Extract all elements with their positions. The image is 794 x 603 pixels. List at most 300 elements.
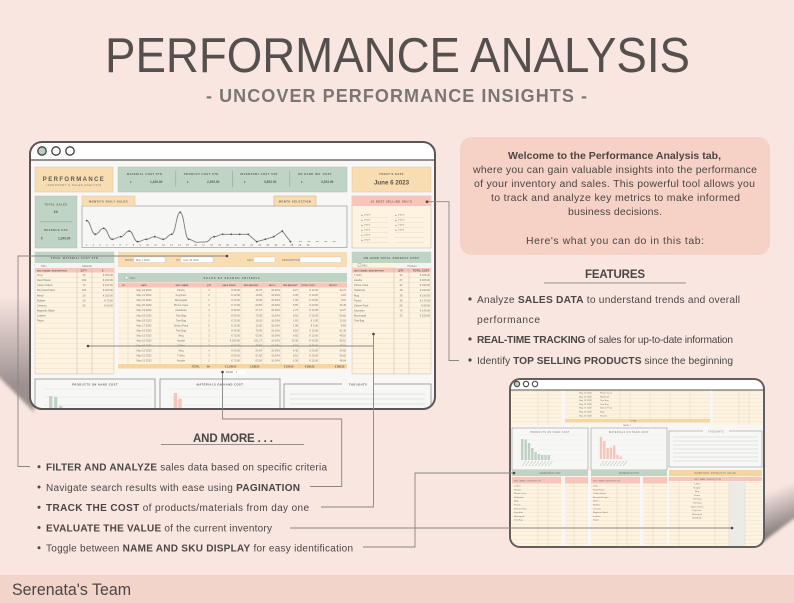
table: on hand total product cost: € 240.00 (420, 288, 431, 292)
top 10 best selling (352, 196, 431, 248)
table: green materials cost: Ceramic (593, 507, 602, 510)
table: sales by search criteria: 61.36 (340, 328, 347, 332)
table: on hand total product cost: 70 (400, 309, 403, 313)
table: sales by search criteria: May 15 2023 (136, 344, 152, 348)
table: sales by search criteria: € 12.00 (231, 298, 241, 302)
chart: materials on hand cost: MATERIALS ON HAND COST (609, 431, 649, 434)
table: sales by search criteria: € 180.00 (230, 338, 241, 342)
table: green materials cost: Vinyl (593, 486, 598, 488)
table: sales by search criteria: 1.09 (293, 293, 299, 297)
connector: pagination (222, 372, 342, 486)
table: sales by search criteria: TAX AMOUNT (283, 284, 298, 287)
table: on hand total product cost: € 150.00 (420, 314, 431, 318)
table: green products cost: Hoodie (514, 489, 522, 491)
table: total material cost: € 60.00 (104, 303, 114, 307)
table: sales by search criteria: SKU / NAME (176, 284, 189, 287)
table: green products cost: T-Shirt (514, 484, 521, 488)
table: total material cost: 100 (82, 288, 87, 292)
table: sales by search criteria: 2 (208, 293, 210, 297)
table: sales by search criteria: Tote Bag (176, 328, 187, 332)
table: sales by search criteria: 0.91 (341, 298, 347, 302)
table: inventory products value: Notebook (692, 517, 703, 520)
table: total material cost: € 200.00 (103, 293, 114, 297)
table: green materials cost: Magnetic Black (593, 511, 609, 514)
header: performance (35, 167, 113, 192)
table: total material cost: € (102, 268, 104, 272)
table: sales by search criteria: 10.00% (271, 308, 281, 312)
subtitle: - UNCOVER PERFORMANCE INSIGHTS - (206, 86, 587, 106)
table: sales by search criteria: 3 (208, 328, 210, 332)
and more heading: AND MORE . . . (193, 433, 273, 445)
table: on hand total product cost: 38 (400, 293, 403, 297)
table: total material cost: € 200.00 (103, 288, 114, 292)
top tables: May 17 2023 (579, 408, 592, 410)
table: inventory products value (669, 470, 762, 548)
table: sales by search criteria: TOTAL (192, 365, 200, 368)
table: total material cost: SKU (41, 264, 46, 268)
table: sales by search criteria: 1 (208, 318, 210, 322)
top tables: May 19 2023 (579, 396, 592, 398)
top tables: Phone Case (600, 392, 613, 394)
table: on hand total product cost: 48 (400, 288, 403, 292)
table: total material cost: 20 (83, 293, 86, 297)
table: inventory products value: Mousepad (692, 514, 703, 516)
table: on hand total product cost: T-Shirt (354, 273, 362, 277)
top tables: May 18 2023 (579, 400, 592, 402)
table: sales by search criteria: 48.64 (340, 359, 347, 363)
table: inventory products value: Tote Bag (693, 498, 702, 501)
intro callout box: Here's what you can do in this tab: (526, 235, 704, 247)
table: green products cost: GENERATED COST (539, 472, 561, 475)
table: sales by search criteria: € 15.00 (231, 323, 241, 327)
table: sales by search criteria: T-Shirt (177, 344, 185, 348)
connector: top selling (427, 202, 459, 360)
table: total material cost: € 70.00 (104, 298, 114, 302)
KPI strip: 3,253.00 (321, 180, 334, 184)
table: sales by search criteria: May 15 2023 (136, 349, 152, 353)
table: sales by search criteria: 10.00% (271, 349, 281, 353)
table: on hand total product cost: Tote Bag (354, 319, 365, 323)
table: sales by search criteria: May 15 2023 (136, 354, 152, 358)
lower window frame (510, 379, 764, 547)
intro callout box: business decisions. (568, 206, 662, 218)
table: green materials cost: Paper (593, 519, 599, 522)
table: on hand total product cost: € 420.00 (420, 273, 431, 277)
intro callout box: where you can gain valuable insights into the performance (472, 164, 757, 176)
table: sales by search criteria: SALE PRICE (222, 284, 236, 287)
table: on hand total product cost: Phone Case (354, 283, 369, 287)
and more list: FILTER AND ANALYZE sales data based on specific criteria (46, 462, 327, 474)
table: sales by search criteria: € 104.00 (284, 365, 294, 368)
table: sales by search criteria: 4 (208, 349, 210, 353)
table: sales by search criteria: € 15.00 (309, 313, 319, 317)
chart: materials on hand cost (160, 378, 280, 408)
table: sales by search criteria: Mousepad (175, 298, 188, 302)
top tables: May 18 2023 (579, 404, 592, 406)
date and filter bar: FROM: (125, 258, 134, 262)
table: sales by search criteria: 66 (207, 365, 210, 368)
KPI strip: € (301, 180, 303, 184)
table: sales by search criteria: May 21 2023 (136, 293, 152, 297)
table: sales by search criteria: 10.05 (256, 298, 263, 302)
table: sales by search criteria: € 360.00 (305, 365, 315, 368)
table: sales by search criteria: 12.60 (256, 323, 263, 327)
date and filter bar: June 30 2023 (183, 258, 199, 262)
table: total material cost (35, 252, 114, 374)
table: sales by search criteria: 18.18 (256, 318, 263, 322)
total sales panel: REVENUE STD (44, 228, 68, 232)
table: sales by search criteria: Hoodie (177, 359, 186, 363)
chart: products on hand cost (512, 428, 588, 470)
table: inventory products value: SKU / NAME / DESCRIPTION (694, 478, 721, 481)
table: on hand total product cost: Mousepad (354, 314, 367, 318)
window control dots (38, 147, 74, 155)
table: green products cost: Mousepad (514, 516, 525, 518)
line chart: month's daily sales: 1 2 3 4 5 6 7 8 9 10 11 12 13 14 15 16 17 18 19 20 21 22 23 24 25 26 27 28 29 30 (86, 244, 310, 247)
table: green materials cost: MATERIALS COST (619, 472, 640, 475)
table: inventory products value: Poster (694, 494, 700, 497)
table: sales by search criteria: 5 (208, 323, 210, 327)
table: sales by search criteria: € 25.00 (309, 344, 319, 348)
KPI strip: 3,693.00 (264, 180, 277, 184)
table: inventory products value: Sticker Pack (691, 505, 704, 508)
table: total material cost: Leather (37, 314, 46, 318)
table: sales by search criteria: PROFIT (329, 285, 338, 287)
table: sales by search criteria: ID (122, 285, 125, 287)
footer band: Serenata's Team (12, 580, 131, 599)
table: sales by search criteria: 56.82 (340, 354, 347, 358)
table: sales by search criteria: TOTAL COST (301, 284, 316, 287)
table: sales by search criteria: 0.91 (341, 293, 347, 297)
table: on hand total product cost: Mug (354, 293, 360, 297)
table: total material cost: 40 (83, 273, 86, 277)
table: sales by search criteria: € 15.00 (309, 308, 319, 312)
table: on hand total product cost: € 89.00 (421, 303, 431, 307)
and more list: EVALUATE THE VALUE of the current inventory (46, 523, 272, 534)
table: sales by search criteria: € 20.00 (309, 349, 319, 353)
table: on hand total product cost: 42 (400, 273, 403, 277)
table: sales by search criteria: 1 (208, 298, 210, 302)
shadow: main window (0, 290, 34, 412)
table: green materials cost: Cotton Fabric (593, 492, 607, 495)
table: sales by search criteria: May 15 2023 (136, 359, 152, 363)
table: sales by search criteria: SALES BY SEARCH CRITERIA (204, 276, 260, 280)
table: total material cost: Material (82, 264, 92, 268)
line chart: month's daily sales: MONTH SELECTION (279, 200, 311, 204)
table: total material cost: Ceramic (37, 303, 47, 307)
table: sales by search criteria: SKU (130, 276, 135, 280)
table: sales by search criteria: 151.27 (254, 338, 263, 342)
table: sales by search criteria: 10.00% (271, 313, 281, 317)
table: sales by search criteria: Tote Bag (176, 313, 187, 317)
table: green materials cost: Hard Plastic (593, 488, 606, 491)
table: sales by search criteria: May 15 2023 (136, 333, 152, 337)
table: sales by search criteria: € 72.00 (231, 303, 241, 307)
table: total material cost: Cotton Fabric (37, 283, 53, 287)
top tables: Mug (600, 412, 605, 414)
total sales panel (35, 196, 77, 248)
table: sales by search criteria: 10.00% (271, 338, 281, 342)
date and filter bar: DESCRIPTION: (282, 258, 301, 262)
table: sales by search criteria: 8.18 (293, 344, 299, 348)
features list (468, 295, 740, 367)
table: sales by search criteria: 10.84 (256, 293, 263, 297)
table: sales by search criteria: 2.73 (293, 308, 299, 312)
table: sales by search criteria: May 15 2023 (136, 338, 152, 342)
table: sales by search criteria: 3 (208, 303, 210, 307)
top tables: Sticker Pack (600, 407, 613, 410)
chart: materials on hand cost (591, 428, 667, 470)
title: PERFORMANCE ANALYSIS (105, 29, 690, 83)
table: total material cost: € 200.00 (103, 278, 114, 282)
table: sales by search criteria: 12.27 (340, 308, 347, 312)
table: on hand total product cost: 33 (400, 283, 403, 287)
title bar (31, 143, 434, 159)
table: sales by search criteria: € 20.00 (231, 318, 241, 322)
table: sales by search criteria: May 18 2023 (136, 318, 152, 322)
table: on hand total product cost: ON HAND TOTAL PRODUCT COST (364, 256, 419, 260)
table: sales by search criteria: 48.18 (340, 333, 347, 337)
table: green materials cost: Rubber (593, 504, 600, 506)
table: sales by search criteria: 10.00% (271, 323, 281, 327)
table: sales by search criteria: € 5.00 (311, 318, 319, 322)
table: total material cost: Recycled Paper (37, 288, 55, 292)
table: sales by search criteria: € 20.00 (309, 303, 319, 307)
table: sales by search criteria: 81.82 (256, 354, 263, 358)
table: sales by search criteria: 40.91 (340, 344, 347, 348)
table: green products cost: Notebook (514, 496, 524, 499)
connector: track the cost (88, 334, 374, 507)
table: on hand total product cost: Product (408, 264, 417, 268)
connector end dots (87, 200, 733, 529)
shadow: lower window (760, 482, 794, 544)
KPI strip: ON HAND INV. COST (298, 172, 332, 176)
table: green products cost: Phone Case (514, 493, 527, 495)
table: sales by search criteria: 13.18 (340, 318, 347, 322)
table: sales by search criteria: 34.55 (340, 349, 347, 353)
top tables: May 20 2023 (579, 392, 592, 394)
table: sales by search criteria: T-Shirt (177, 354, 185, 358)
table: sales by search criteria: € 70.00 (231, 359, 241, 363)
table: on hand total product cost: Notebook (354, 288, 366, 292)
pagination (226, 370, 245, 374)
table: total material cost: Rubber (37, 298, 46, 302)
top tables: Tote Bag (600, 399, 609, 402)
intro callout box: of your inventory and sales. This powerful tool allows you (474, 178, 755, 190)
intro callout box: Welcome to the Performance Analysis tab, (508, 150, 721, 162)
table: total material cost: Hard Plastic (37, 278, 52, 282)
table: sales by search criteria: Plushy (177, 288, 186, 292)
lower window control dots (514, 381, 538, 387)
chart: materials on hand cost: MATERIALS ON HAND COST (197, 382, 243, 386)
table: on hand total product cost: Hoodie (354, 278, 363, 282)
table: sales by search criteria: 45.45 (340, 303, 347, 307)
connector arrows (18, 200, 733, 547)
KPI strip: INVENTORY COST STD (240, 172, 278, 176)
table: on hand total product cost: € 140.00 (420, 309, 431, 313)
total sales panel: 1,249.00 (58, 236, 71, 240)
features list: REAL-TIME TRACKING of sales for up-to-date information (477, 335, 733, 346)
table: sales by search criteria: May 21 2023 (136, 298, 152, 302)
table: sales by search criteria: May 24 2023 (136, 288, 152, 292)
table: inventory products value: Mug (695, 491, 700, 493)
table: sales by search criteria: May 17 2023 (136, 323, 152, 327)
top tables (512, 390, 762, 427)
table: sales by search criteria: 75.55 (256, 313, 263, 317)
table: inventory products value: INVENTORY PRODUCTS VALUE (694, 472, 736, 475)
table: on hand total product cost: € 405.00 (420, 278, 431, 282)
table: sales by search criteria: 27.27 (256, 308, 263, 312)
table: on hand total product cost: Poster (354, 298, 362, 302)
table: sales by search criteria: TAX % (269, 284, 275, 287)
today's date (352, 167, 431, 192)
table: sales by search criteria: 9.27 (293, 288, 299, 292)
table: green materials cost (591, 470, 667, 548)
table: on hand total product cost (352, 252, 431, 374)
top tables: Hoodie (600, 415, 608, 417)
table: sales by search criteria: 76.36 (256, 328, 263, 332)
pagination: PAGE (226, 370, 233, 374)
table: green products cost: Tote Bag (514, 519, 523, 522)
table: sales by search criteria: 10.00% (271, 298, 281, 302)
table: sales by search criteria: 1.82 (293, 318, 299, 322)
table: sales by search criteria: 10.00% (271, 354, 281, 358)
connector: toggle name and sku (363, 473, 514, 547)
KPI strip: 1,449.00 (150, 180, 163, 184)
table: sales by search criteria: 10.00% (271, 359, 281, 363)
KPI strip: € (130, 180, 132, 184)
top tables: May 15 2023 (579, 415, 592, 417)
table: sales by search criteria: Mug (178, 333, 184, 337)
table: total material cost: QTY (81, 268, 87, 272)
KPI strip: € (187, 180, 189, 184)
KPI strip: 2,293.00 (207, 180, 220, 184)
table: sales by search criteria (118, 273, 347, 368)
table: sales by search criteria: 46.75 (256, 288, 263, 292)
date and filter bar: TO: (176, 258, 181, 262)
table: on hand total product cost: € 190.00 (420, 293, 431, 297)
table: on hand total product cost: 27 (400, 278, 403, 282)
table: on hand total product cost: SKU / NAME / DESCRIPTION (354, 270, 384, 272)
table: green products cost: Keychain (514, 512, 524, 514)
table: sales by search criteria: 90.91 (340, 338, 347, 342)
top 10 best selling: ► YYYY (395, 224, 405, 227)
header: performance: INVENTORY & SALES ANALYSIS (46, 183, 102, 187)
table: total material cost: Magnetic Black (37, 309, 55, 313)
table: sales by search criteria: € 56.00 (231, 288, 241, 292)
top tables: May 16 2023 (579, 412, 592, 414)
table: sales by search criteria: 3 (208, 313, 210, 317)
chart: products on hand cost: PRODUCTS ON HAND COST (530, 431, 570, 434)
table: sales by search criteria: 1.09 (293, 298, 299, 302)
table: green products cost (512, 470, 588, 548)
table: total material cost: Metal (37, 293, 44, 297)
table: inventory products value: Keychain (692, 510, 702, 512)
table: sales by search criteria: € 25.00 (309, 354, 319, 358)
line chart: month's daily sales (82, 196, 347, 248)
table: sales by search criteria: 63.60 (256, 333, 263, 337)
dashboard contents (30, 142, 435, 414)
table: sales by search criteria: € 10.00 (309, 298, 319, 302)
header: performance: PERFORMANCE (43, 177, 105, 183)
table: sales by search criteria: May 18 2023 (136, 313, 152, 317)
table: sales by search criteria: € 586.00 (335, 365, 345, 368)
top tables: Tote Bag (600, 403, 609, 406)
total sales panel: 66 (54, 210, 58, 214)
connector: evaluate the value (290, 527, 732, 529)
intro callout box: to track and analyze key metrics to make informed (491, 192, 740, 204)
pagination: 1 (236, 370, 238, 374)
table: sales by search criteria: May 19 2023 (136, 308, 152, 312)
top 10 best selling: ► YYYY (395, 219, 405, 222)
window: inventory dashboard (510, 379, 764, 548)
table: sales by search criteria: 10.00% (271, 288, 281, 292)
table: total material cost: € 300.00 (103, 273, 114, 277)
table: sales by search criteria: 3 (208, 333, 210, 337)
table: on hand total product cost: SKU (362, 264, 367, 268)
table: sales by search criteria: 8.64 (341, 323, 347, 327)
table: sales by search criteria: € 5.00 (311, 323, 319, 327)
table: on hand total product cost: 35 (400, 298, 403, 302)
table: green materials cost: Leather (593, 515, 601, 518)
table: sales by search criteria: 78.55 (256, 344, 263, 348)
table: sales by search criteria: Keychain (176, 293, 187, 297)
top 10 best selling: ► YYYY (361, 219, 371, 222)
table: total material cost: 70 (83, 283, 86, 287)
table: sales by search criteria: 10.00% (271, 303, 281, 307)
table: sales by search criteria: 1,038.00 (250, 365, 260, 368)
table: sales by search criteria: € 60.00 (231, 349, 241, 353)
table: sales by search criteria: € 15.00 (309, 359, 319, 363)
table: sales by search criteria: 16.36 (292, 338, 299, 342)
and more list: Navigate search results with ease using PAGINATION (46, 483, 300, 494)
title bar (511, 380, 763, 390)
table: sales by search criteria: 2 (208, 338, 210, 342)
KPI strip: MATERIAL COST STD (127, 172, 162, 176)
table: on hand total product cost: € 175.00 (420, 298, 431, 302)
table: sales by search criteria: 10.00% (271, 333, 281, 337)
table: sales by search criteria: Mug (178, 349, 184, 353)
table: total material cost: 100 (82, 278, 87, 282)
table: total material cost: 20 (83, 298, 86, 302)
table: sales by search criteria: QTY (207, 285, 212, 287)
top 10 best selling: ► YYYY (395, 229, 405, 232)
table: sales by search criteria: 8.18 (293, 328, 299, 332)
table: total material cost: Vinyl (37, 273, 43, 277)
table: sales by search criteria: 54.54 (256, 349, 263, 353)
table: sales by search criteria: 10.00% (271, 344, 281, 348)
table: sales by search criteria: 8.18 (293, 313, 299, 317)
chart: products on hand cost (34, 378, 156, 408)
table: on hand total product cost: 30 (400, 314, 403, 318)
table: on hand total product cost: € 330.00 (420, 283, 431, 287)
table: sales by search criteria: 34.73 (340, 288, 347, 292)
KPI strip: € (244, 180, 246, 184)
table: sales by search criteria: € 90.00 (231, 313, 241, 317)
table: sales by search criteria: € 30.00 (231, 308, 241, 312)
features list: Identify TOP SELLING PRODUCTS since the beginning (477, 356, 733, 367)
table: sales by search criteria: 1 (208, 359, 210, 363)
chart: products on hand cost: PRODUCTS ON HAND COST (72, 382, 118, 386)
top 10 best selling: ► YYYY (361, 234, 371, 237)
window: performance dashboard (30, 142, 435, 414)
table: on hand total product cost: 89 (400, 303, 403, 307)
table: total material cost: € 140.00 (103, 283, 114, 287)
features heading: FEATURES (585, 269, 645, 281)
table: inventory products value: T-Shirt (694, 482, 701, 486)
table: on hand total product cost: TOTAL COST (413, 268, 430, 272)
top tables: Notebook (600, 395, 610, 398)
